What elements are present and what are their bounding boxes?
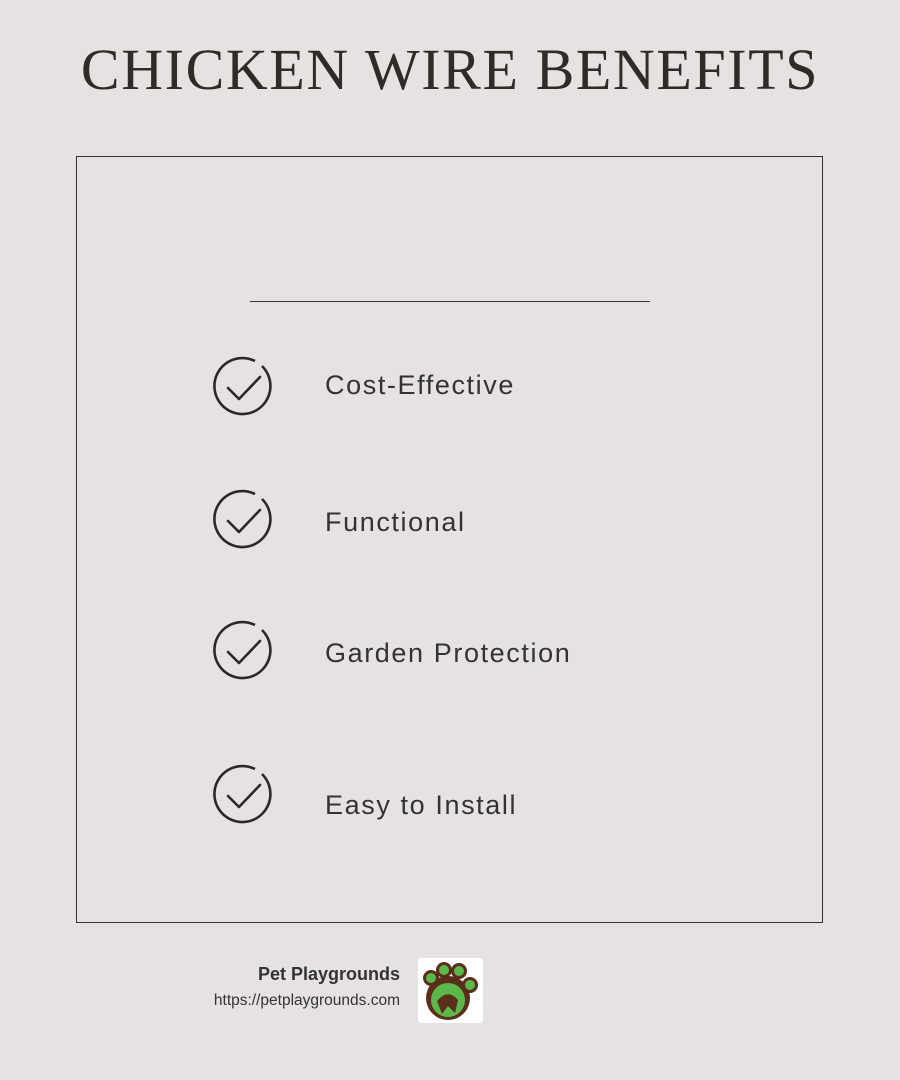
footer brand text (214, 964, 400, 1009)
icon: paw logo (418, 958, 483, 1023)
footer brand text: Pet Playgrounds (258, 964, 400, 984)
item: Functional (213, 490, 466, 548)
item: Functional: Functional (325, 507, 466, 537)
panel: benefits frame (76, 156, 823, 923)
item: Cost-Effective: Cost-Effective (325, 370, 515, 400)
divider line (250, 301, 650, 302)
item: Easy to Install (213, 764, 517, 824)
item: Garden Protection: Garden Protection (325, 638, 571, 668)
footer brand text: https://petplaygrounds.com (214, 992, 400, 1009)
item: Cost-Effective (213, 356, 515, 416)
item: Easy to Install: Easy to Install (325, 790, 517, 820)
title: CHICKEN WIRE BENEFITS (81, 37, 819, 102)
item: Garden Protection (213, 620, 571, 680)
